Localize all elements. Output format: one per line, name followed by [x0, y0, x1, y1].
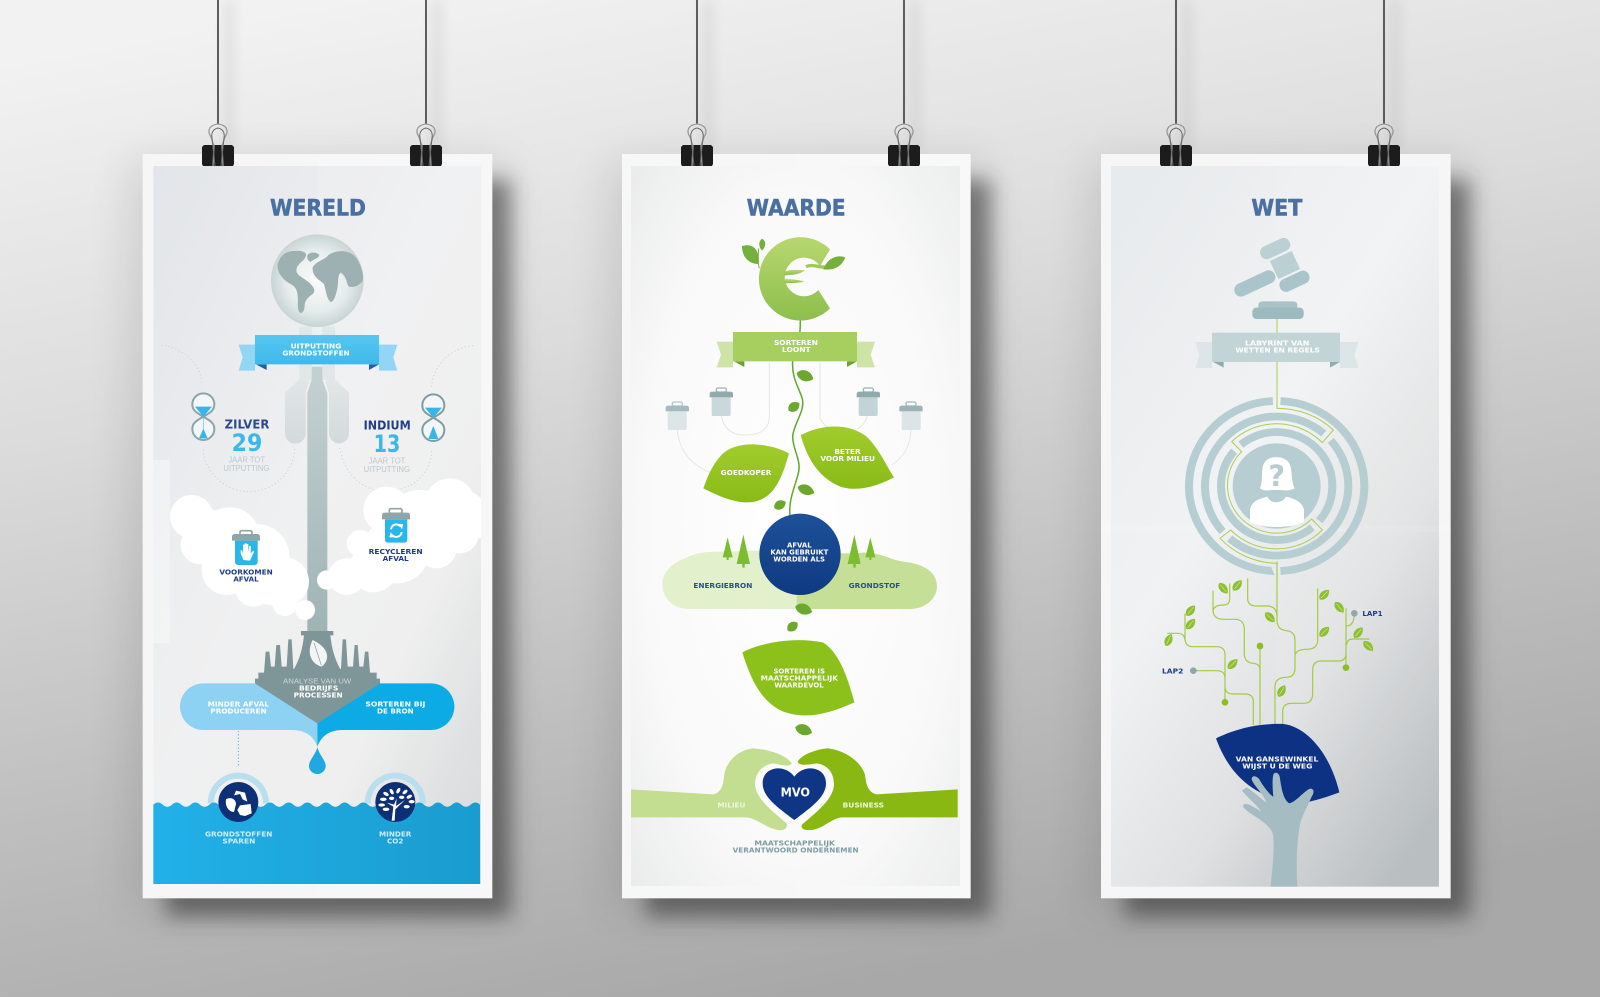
cloud left	[170, 495, 315, 620]
inner print area	[1111, 166, 1439, 887]
badge: grondstoffen sparen: GRONDSTOFFEN	[205, 830, 272, 839]
poster: waarde	[622, 154, 971, 898]
hill: energiebron	[662, 551, 797, 609]
blue leaf: WIJST U DE WEG	[1242, 762, 1312, 771]
fold overlays	[1101, 154, 1451, 898]
heart: mvo	[763, 768, 826, 820]
paper	[1101, 154, 1451, 898]
banner: labyrint: WETTEN EN REGELS	[1235, 345, 1320, 354]
leaf: goedkoper	[703, 444, 789, 502]
person with question mark	[1260, 457, 1295, 490]
label: lap2: LAP2	[1162, 667, 1183, 676]
leaf: beter voor milieu	[801, 426, 894, 489]
circuit tree	[1167, 562, 1369, 725]
hourglass: indium	[422, 394, 444, 441]
banner: uitputting grondstoffen: UITPUTTING	[291, 341, 341, 350]
trees	[723, 535, 875, 568]
icon: leaf	[310, 640, 327, 667]
stat: indium 13: INDIUM	[364, 418, 411, 433]
water	[153, 773, 480, 884]
paper	[622, 154, 971, 898]
hill: grondstof: GRONDSTOF	[849, 581, 900, 590]
stat: zilver 29: UITPUTTING	[223, 464, 269, 473]
factory funnel	[255, 631, 380, 723]
circle: afval kan gebruikt worden als: KAN GEBRUIKT	[770, 548, 828, 557]
caption: MAATSCHAPPELIJK	[754, 839, 835, 848]
factory funnel: ANALYSE VAN UW	[283, 677, 351, 686]
pill: sorteren bij de bron	[317, 683, 454, 747]
leaf: sorteren is maatschappelijk waardevol: WAARDEVOL	[774, 680, 824, 689]
leaf: beter voor milieu: BETER	[834, 447, 861, 456]
poster: wereld	[143, 154, 492, 898]
fold overlays	[153, 154, 492, 898]
badge: minder co2	[375, 782, 415, 846]
leaf: sorteren is maatschappelijk waardevol: MAATSCHAPPELIJK	[761, 673, 838, 682]
icon: euro plant	[742, 237, 845, 320]
icon: trash with recycle	[382, 509, 410, 543]
trash bins	[666, 388, 923, 430]
poster shadows	[130, 160, 1470, 917]
banner: sorteren loont: LOONT	[782, 345, 811, 354]
hill: grondstof	[797, 553, 937, 609]
leaf: beter voor milieu: VOOR MILIEU	[820, 454, 875, 463]
binder clips	[202, 124, 1400, 166]
stat: zilver 29: JAAR TOT	[228, 456, 265, 465]
maze	[1176, 362, 1378, 584]
rings behind water	[208, 773, 426, 803]
leaf: sorteren is maatschappelijk waardevol	[742, 640, 854, 715]
inner print area	[153, 166, 481, 884]
lower half of poster wet	[1162, 562, 1383, 887]
vine	[790, 317, 803, 515]
badge: grondstoffen sparen	[205, 782, 272, 846]
green path	[1220, 362, 1333, 563]
cloud right	[317, 478, 492, 595]
fold overlays	[631, 154, 971, 898]
banner: labyrint	[1195, 333, 1359, 368]
pill: minder afval: MINDER AFVAL	[208, 700, 269, 709]
stat: zilver 29: ZILVER	[225, 417, 270, 432]
stat: zilver 29	[223, 417, 270, 473]
stat: indium 13: UITPUTTING	[364, 465, 410, 474]
pill: sorteren bij de bron: SORTEREN BIJ	[365, 700, 426, 709]
stat: indium 13	[364, 418, 411, 474]
stat: zilver 29: 29	[232, 429, 262, 457]
blue leaf: VAN GANSEWINKEL	[1236, 755, 1319, 764]
pill: minder afval: PRODUCEREN	[210, 707, 267, 716]
tree leaves	[1162, 578, 1376, 699]
badge: grondstoffen sparen: SPAREN	[222, 837, 255, 846]
circle: afval kan gebruikt worden als	[759, 514, 841, 595]
pill: minder afval	[180, 683, 317, 747]
factory funnel: PROCESSEN	[294, 691, 343, 700]
label: recycleren afval	[369, 547, 423, 563]
paper	[143, 154, 492, 898]
blue leaf	[1216, 724, 1339, 804]
label: voorkomen afval: AFVAL	[233, 575, 259, 584]
badge: minder co2: MINDER	[379, 830, 412, 839]
stat: indium 13: JAAR TOT	[369, 457, 405, 466]
dotted connector	[237, 731, 240, 767]
label: voorkomen afval	[219, 568, 273, 584]
banner: uitputting grondstoffen	[239, 335, 397, 371]
label: voorkomen afval: VOORKOMEN	[219, 568, 273, 577]
stat: indium 13: 13	[374, 430, 400, 458]
lower half of poster waarde	[631, 514, 958, 855]
label: recycleren afval: RECYCLEREN	[369, 547, 423, 556]
poster: wet	[1101, 154, 1451, 898]
heart: mvo: MVO	[781, 785, 810, 800]
banner: labyrint: LABYRINT VAN	[1245, 338, 1309, 347]
hand: business	[798, 748, 958, 830]
small leaves	[785, 601, 814, 738]
icon: gavel	[1232, 236, 1312, 319]
hill: energiebron: ENERGIEBRON	[693, 581, 752, 590]
label: lap2	[1162, 667, 1197, 676]
tree nodes	[1222, 643, 1349, 706]
title: WAARDE	[747, 196, 846, 221]
hand	[1242, 773, 1314, 887]
small leaves on vine	[772, 368, 816, 512]
label: lap1: LAP1	[1362, 609, 1383, 618]
label: recycleren afval: AFVAL	[383, 554, 409, 563]
icon: trash with hand	[232, 531, 260, 565]
dotted arcs	[162, 345, 473, 492]
label: lap1	[1351, 609, 1383, 618]
hourglass: zilver	[192, 393, 214, 440]
title: WET	[1251, 196, 1302, 221]
banner: sorteren loont	[717, 332, 875, 367]
leaf: sorteren is maatschappelijk waardevol: SORTEREN IS	[773, 666, 825, 675]
maze: ?	[1268, 459, 1285, 493]
caption: VERANTWOORD ONDERNEMEN	[733, 846, 859, 855]
icon: drop	[309, 747, 326, 774]
factory funnel: BEDRIJFS	[299, 684, 338, 693]
hand: business: BUSINESS	[843, 801, 884, 810]
hanging strings	[218, 0, 1384, 124]
connector lines	[677, 363, 911, 472]
lower half of poster wereld	[180, 509, 454, 846]
pipe system	[285, 327, 349, 633]
banner: sorteren loont: SORTEREN	[774, 338, 818, 347]
green connector above maze	[1275, 319, 1278, 333]
pill: sorteren bij de bron: DE BRON	[377, 707, 414, 716]
badge: minder co2: CO2	[387, 837, 403, 846]
leaf: goedkoper: GOEDKOPER	[721, 468, 772, 477]
circle: afval kan gebruikt worden als: WORDEN ALS	[773, 554, 825, 563]
caption	[733, 839, 859, 855]
inner print area	[631, 166, 960, 886]
banner: uitputting grondstoffen: GRONDSTOFFEN	[282, 348, 350, 357]
globe	[271, 234, 364, 327]
circle: afval kan gebruikt worden als: AFVAL	[787, 541, 812, 550]
title: WERELD	[270, 196, 366, 221]
hand: milieu: MILIEU	[717, 801, 745, 810]
hand: milieu	[631, 748, 792, 830]
string shadows	[224, 0, 1400, 150]
